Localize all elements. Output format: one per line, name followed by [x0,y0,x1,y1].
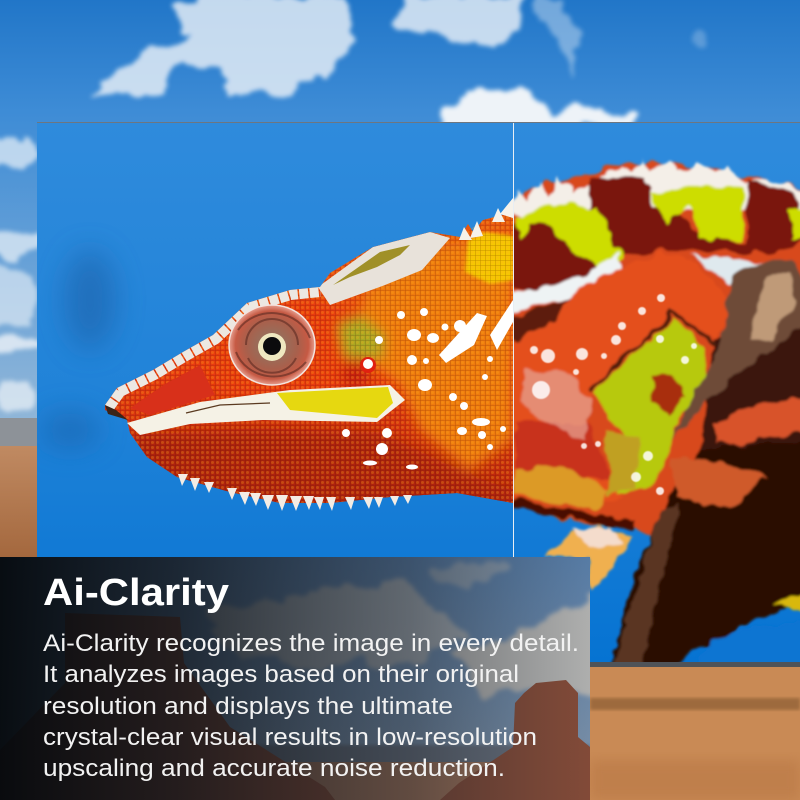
eye [229,305,315,385]
lip red above mouth [130,365,215,415]
body text: It analyzes images based on their original [43,661,519,688]
crest spines [505,160,800,215]
comparison panel: chameleon photo [37,122,800,670]
left mesa [0,613,335,800]
right mesa [440,680,590,800]
scale texture [100,210,515,510]
throat lobe [543,525,634,590]
panel ground [0,762,590,800]
dark lower jaw [130,428,513,510]
teeth spines under the jaw [178,474,412,511]
dorsal spines near the divider [459,198,513,240]
yellow shoulder patch [465,232,513,284]
panel clouds [210,562,600,695]
mouth line [186,403,270,413]
panel sky [0,557,590,800]
body text [43,630,579,782]
skin fold line [590,313,716,391]
soft colour zones [130,235,513,510]
body base [505,162,800,560]
white scales along the brow [105,287,320,405]
dark right side behind stick [698,326,800,453]
mouth yellow band [277,387,393,418]
mouth white band [127,385,405,435]
lower yellow-orange mottling [515,465,610,510]
white spots on cheek [342,300,513,470]
panel horizon [200,745,590,767]
body text: Ai-Clarity recognizes the image in every detail. [43,630,579,657]
toes, lower [670,457,767,507]
dark limb and branch [610,440,800,670]
sharp side: chameleon head [40,198,515,511]
body text: upscaling and accurate noise reduction. [43,755,505,782]
desert ground, left strip [0,418,37,446]
lower green patch mottling [605,430,640,495]
dark overlay [0,557,590,800]
head base [105,212,513,503]
pupil [263,337,281,355]
red spots behind the eye [341,361,369,389]
desert ground, bottom right [590,662,800,800]
green patch behind eye [338,315,385,358]
eye turret [229,305,315,385]
toes, upper [713,398,800,445]
lower yellow patch [773,592,800,613]
body text: resolution and displays the ultimate [43,693,453,720]
lip dark tip [105,405,128,420]
crest green patch right [790,208,800,240]
casque white patch [318,232,450,305]
casque inlay [333,245,410,285]
pale patch under crest [693,256,767,285]
text panel with desert photo background [0,557,600,800]
crest green patch middle [650,186,743,240]
stick, tan [673,260,800,440]
blurred low-resolution side: chameleon body [505,160,800,670]
white stripe [505,254,622,314]
dark belly shadow band [514,298,571,344]
orange flank [505,253,730,500]
pale mottled flank [520,370,590,440]
body text: crystal-clear visual results in low-resolution [43,724,537,751]
blue gap under branch [704,625,748,649]
heading: Ai-Clarity [43,572,229,614]
faint background smudges [40,250,116,448]
body white speckles [530,294,697,495]
eye white ring [258,333,286,361]
crest green patch left [517,203,623,268]
clouds in the sky [0,0,709,409]
red around the eye [199,298,356,358]
orange upper cheek [350,235,513,470]
belly edge dark [513,503,633,526]
green side patch [593,318,707,497]
crest dark red bands [505,177,800,290]
red mottled flank [515,420,610,480]
divider line [513,123,514,557]
